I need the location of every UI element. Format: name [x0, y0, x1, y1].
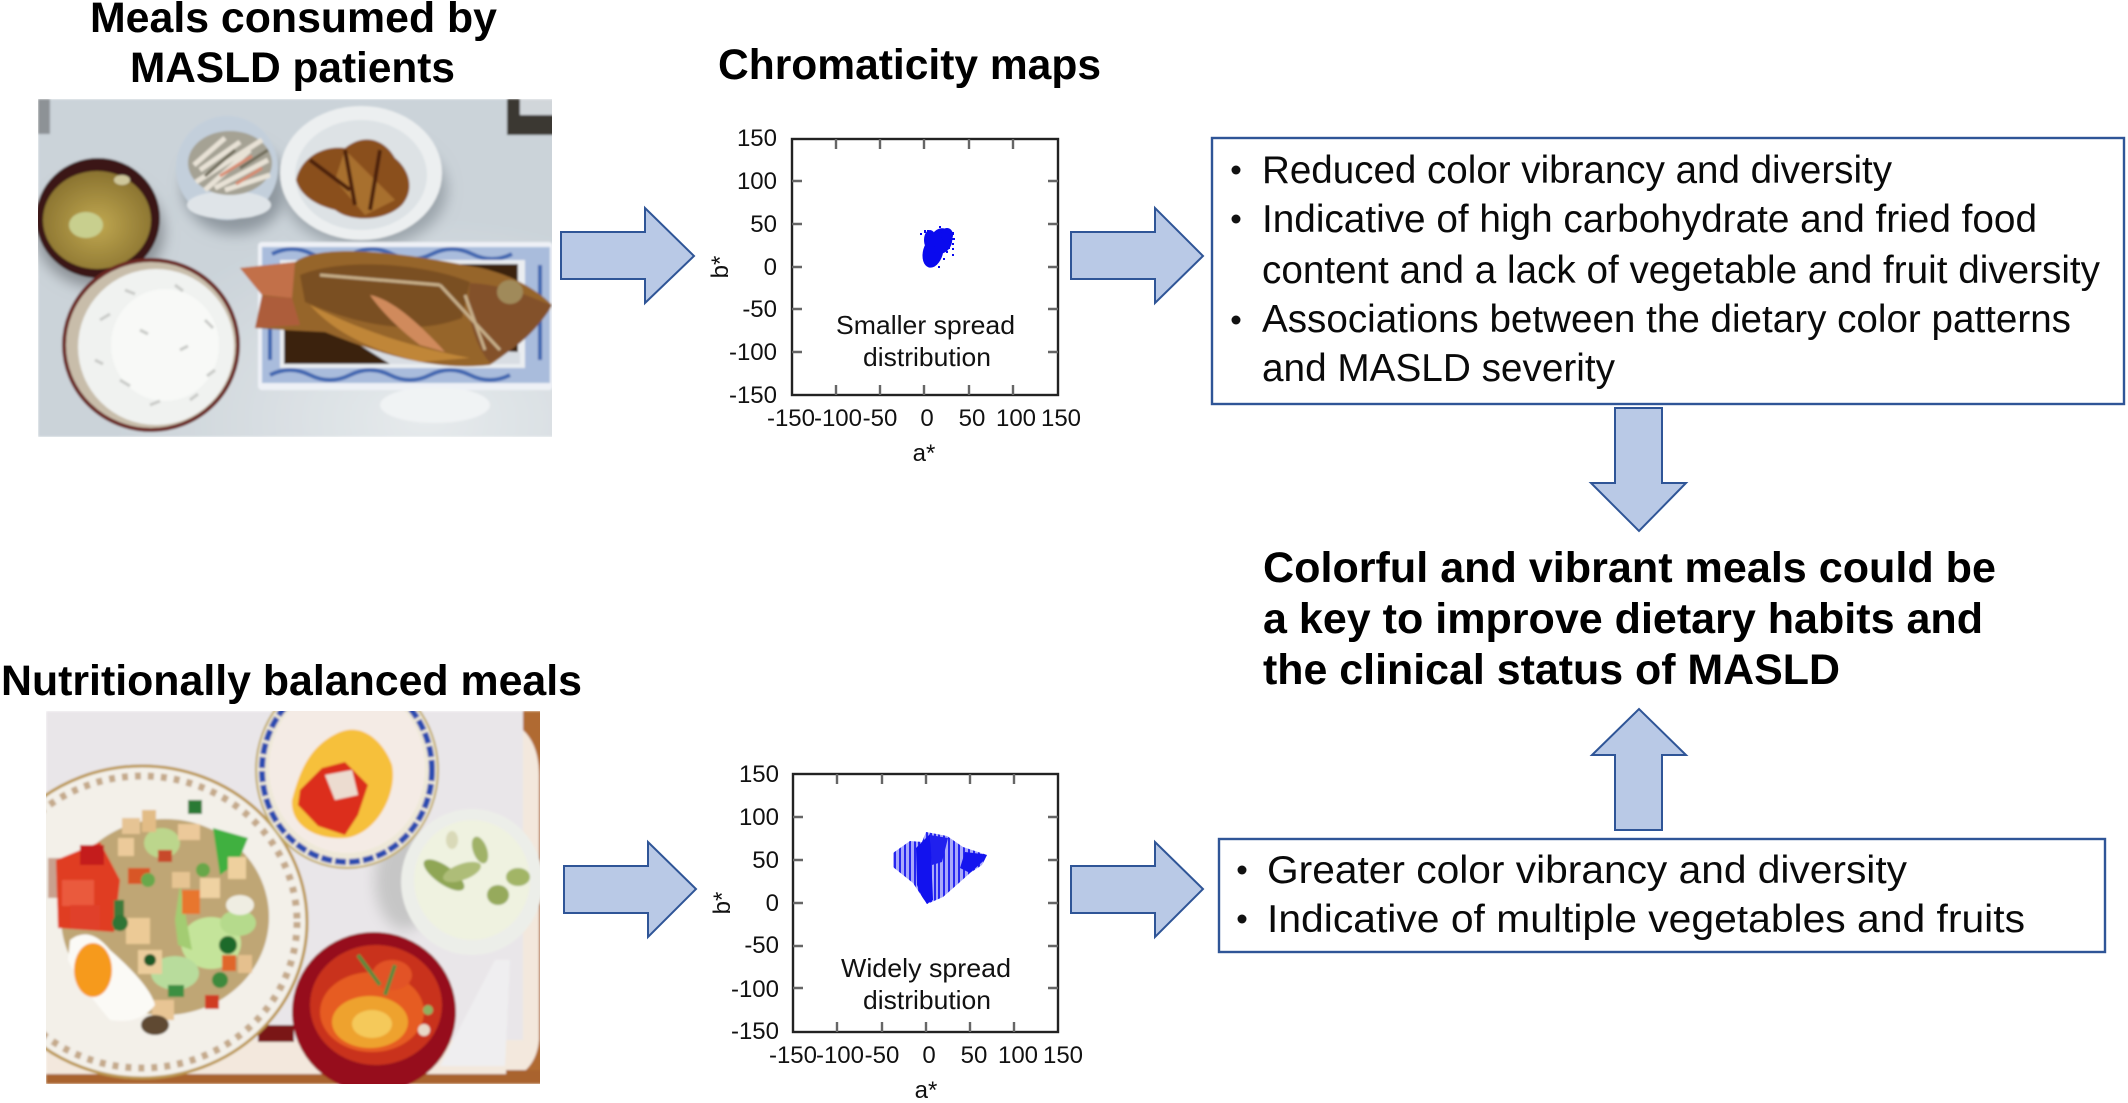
findings text	[1262, 149, 2100, 390]
chart: chromaticity map, MASLD meals	[707, 125, 1081, 467]
y axis tick labels: 50	[752, 847, 779, 874]
arrow: up to conclusion	[1592, 709, 1686, 830]
arrow: photo 1 to chart 1	[561, 208, 694, 303]
blue bowl	[254, 711, 440, 870]
y axis tick labels: 0	[766, 890, 779, 917]
scatter cluster	[893, 832, 987, 904]
y axis tick labels: -150	[729, 382, 777, 409]
y axis tick labels: -50	[744, 932, 779, 959]
y axis tick labels: 50	[750, 211, 777, 238]
x axis tick labels: -100	[814, 405, 862, 432]
photo: nutritionally balanced meal	[46, 711, 540, 1084]
findings text: Associations between the dietary color patterns	[1262, 298, 2071, 341]
shadow	[370, 836, 417, 934]
y axis tick labels: 150	[737, 125, 777, 152]
y axis tick labels: -100	[731, 976, 779, 1003]
chart caption: distribution	[863, 342, 991, 372]
y axis tick labels: 150	[739, 761, 779, 788]
chart caption: Smaller spread	[836, 310, 1015, 340]
x axis tick labels: 100	[996, 405, 1036, 432]
chart caption	[836, 310, 1015, 372]
chart: chromaticity map, balanced meals	[709, 761, 1083, 1103]
fish plate	[258, 242, 553, 390]
x axis tick labels: 150	[1041, 405, 1081, 432]
plate food	[61, 819, 269, 1015]
bullets	[1238, 866, 1246, 924]
conclusion text: a key to improve dietary habits and	[1263, 595, 1983, 643]
y axis tick labels: -50	[742, 296, 777, 323]
text box: MASLD meal findings	[1212, 138, 2124, 404]
red soup bowl	[292, 932, 456, 1092]
x axis tick labels: -150	[769, 1042, 817, 1069]
bullets	[1232, 166, 1240, 324]
arrow: chart 1 to box 1	[1071, 208, 1203, 303]
axis label a*: a*	[913, 440, 935, 467]
findings text: Indicative of multiple vegetables and fruits	[1267, 898, 2025, 941]
arrow: photo 2 to chart 2	[564, 842, 696, 937]
title: meals consumed by MASLD patients: MASLD patients	[130, 44, 455, 92]
x axis tick labels: -50	[865, 1042, 899, 1069]
x axis tick labels: -50	[863, 405, 897, 432]
x axis tick labels: -150	[767, 405, 815, 432]
chart caption: distribution	[863, 985, 991, 1015]
y axis tick labels: -150	[731, 1018, 779, 1045]
findings text	[1267, 849, 2025, 941]
y axis tick labels: 100	[739, 804, 779, 831]
x axis tick labels: 50	[961, 1042, 987, 1069]
findings text: Indicative of high carbohydrate and fried food	[1262, 198, 2037, 241]
egg	[68, 934, 155, 1021]
y axis tick labels	[731, 761, 779, 1045]
y axis tick labels: -100	[729, 339, 777, 366]
y axis tick labels	[729, 125, 777, 409]
findings text: and MASLD severity	[1262, 347, 1615, 390]
x axis tick labels: 0	[922, 1042, 936, 1069]
conclusion text	[1263, 544, 1996, 694]
x axis tick labels	[769, 1042, 1083, 1069]
x axis tick labels: 0	[920, 405, 934, 432]
y axis tick labels: 100	[737, 168, 777, 195]
findings text: content and a lack of vegetable and fruit diversity	[1262, 249, 2100, 292]
x axis tick labels: 100	[998, 1042, 1038, 1069]
text box: balanced meal findings	[1219, 839, 2105, 952]
findings text: Reduced color vibrancy and diversity	[1262, 149, 1892, 192]
conclusion text: Colorful and vibrant meals could be	[1263, 544, 1996, 592]
axis label b*: b*	[709, 892, 736, 914]
photo: meal consumed by MASLD patient	[36, 99, 555, 437]
heading: chromaticity maps: Chromaticity maps	[718, 41, 1101, 89]
findings text: Greater color vibrancy and diversity	[1267, 849, 1908, 892]
x axis tick labels: -100	[816, 1042, 864, 1069]
arrow: chart 2 to box 2	[1071, 842, 1203, 937]
chart caption	[841, 953, 1011, 1015]
rice bowl	[64, 260, 238, 430]
conclusion text: the clinical status of MASLD	[1263, 646, 1840, 694]
title: nutritionally balanced meals: Nutritionally balanced meals	[1, 657, 582, 705]
chart caption: Widely spread	[841, 953, 1011, 983]
x axis tick labels: 50	[959, 405, 985, 432]
title: meals consumed by MASLD patients	[90, 0, 497, 92]
kiwi bowl	[400, 826, 540, 936]
scatter cluster	[919, 225, 956, 270]
y axis tick labels: 0	[764, 254, 777, 281]
x axis tick labels	[767, 405, 1081, 432]
x axis tick labels: 150	[1043, 1042, 1083, 1069]
axis label b*: b*	[707, 256, 734, 278]
arrow: down to conclusion	[1591, 408, 1686, 531]
